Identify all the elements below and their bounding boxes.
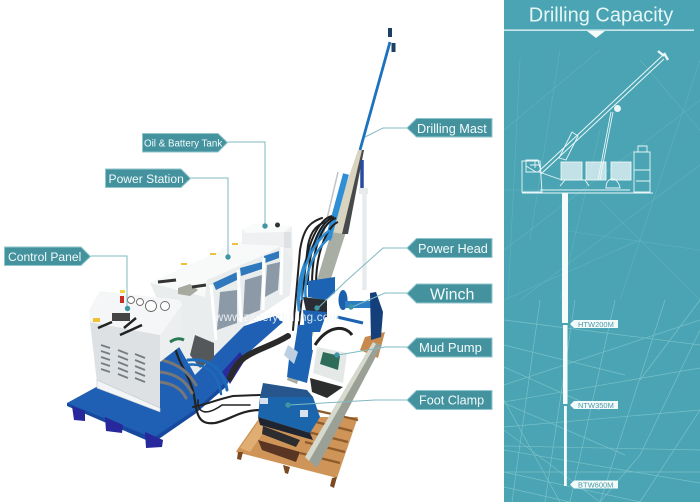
callout: control panel: Control Panel (8, 250, 81, 264)
drilling rig machine (67, 28, 394, 488)
black upper hoses (301, 216, 338, 300)
control panel cabinet (89, 290, 184, 412)
callout: power head (314, 238, 492, 311)
callout: oil and battery tank: Oil & Battery Tank (144, 138, 222, 150)
heading: Drilling Capacity (529, 4, 673, 26)
depth tag: NTW350M: NTW350M (578, 401, 614, 410)
depth rod (562, 193, 568, 486)
winch (337, 290, 383, 340)
callout: drilling mast (365, 118, 492, 137)
callout: power head: Power Head (418, 242, 488, 256)
callout: mud pump (334, 338, 492, 358)
heading pointer (587, 31, 605, 38)
hydraulic hoses (160, 218, 328, 423)
rig line drawing (522, 51, 668, 193)
drilling mast (287, 28, 394, 384)
depth tag: HTW200M: HTW200M (578, 320, 614, 329)
wooden pallet (236, 332, 385, 488)
callout: mud pump: Mud Pump (419, 340, 482, 355)
callout: winch (348, 284, 492, 310)
callout: winch: Winch (430, 286, 474, 304)
callout: control panel (4, 247, 130, 311)
panel: drilling capacity (504, 0, 700, 502)
blue skid base (67, 316, 283, 448)
oil and battery tank (242, 222, 293, 262)
depth tag: BTW600M: BTW600M (578, 480, 613, 490)
callout: oil and battery tank (142, 134, 268, 229)
callout: power station: Power Station (108, 172, 184, 186)
power station hood (150, 242, 293, 375)
callout: foot clamp (285, 390, 492, 410)
foot clamp (258, 383, 320, 447)
long lower rail (305, 342, 382, 468)
callout: drilling mast: Drilling Mast (417, 122, 487, 136)
mud pump unit (310, 328, 352, 398)
callout: foot clamp: Foot Clamp (419, 394, 484, 408)
callout: power station (106, 169, 231, 260)
power head (284, 277, 335, 383)
watermark: www.zzdefydrilling.com (214, 311, 339, 324)
